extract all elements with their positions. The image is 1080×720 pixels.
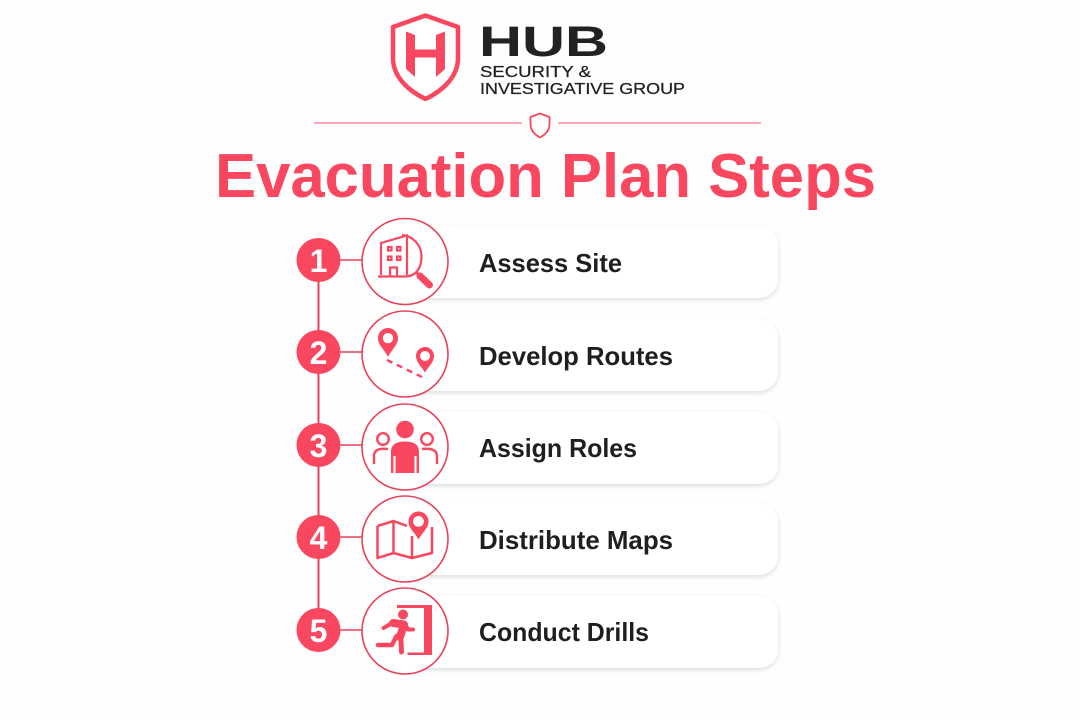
number badge 4: 4: [310, 520, 328, 556]
number badge 1: [296, 238, 340, 282]
step 5: [296, 588, 778, 674]
icon: shield logo: [393, 16, 458, 99]
number badge 5: 5: [310, 613, 327, 649]
card: Develop Routes: [400, 319, 778, 391]
card: Distribute Maps: [400, 503, 778, 575]
connector: [318, 536, 362, 538]
connector: [318, 351, 362, 353]
divider with shield: [314, 114, 761, 138]
label: Develop Routes: [479, 341, 673, 371]
connector: [318, 629, 362, 631]
step 3: [296, 404, 778, 490]
number badge 2: [296, 330, 340, 374]
timeline connector: [318, 260, 320, 630]
number badge 3: 3: [310, 428, 327, 464]
logo wordmark: HUB: HUB: [479, 18, 608, 66]
label: Conduct Drills: [479, 617, 649, 647]
step 4: [296, 496, 778, 582]
step 1: [296, 218, 778, 304]
logo tagline: INVESTIGATIVE GROUP: [480, 81, 685, 98]
number badge 2: 2: [310, 335, 327, 371]
title: Evacuation Plan Steps: [215, 142, 876, 211]
icon: team: [362, 404, 448, 490]
label: Assign Roles: [479, 433, 637, 463]
label: Distribute Maps: [479, 525, 673, 555]
connector: [318, 259, 362, 261]
number badge 1: 1: [310, 243, 327, 279]
number badge 4: [296, 515, 340, 559]
label: Assess Site: [479, 248, 622, 278]
icon: route pins: [362, 311, 448, 397]
logo tagline: [480, 64, 685, 98]
icon: building with magnifier: [362, 218, 448, 304]
card: Assess Site: [400, 226, 778, 298]
icon: map with pin: [362, 496, 448, 582]
logo tagline: SECURITY &: [480, 64, 591, 81]
logo: [393, 16, 685, 99]
card: Conduct Drills: [400, 596, 778, 668]
number badge 5: [296, 608, 340, 652]
icon: running exit: [362, 588, 448, 674]
card: Assign Roles: [400, 412, 778, 484]
number badge 3: [296, 423, 340, 467]
step 2: [296, 311, 778, 397]
connector: [318, 444, 362, 446]
